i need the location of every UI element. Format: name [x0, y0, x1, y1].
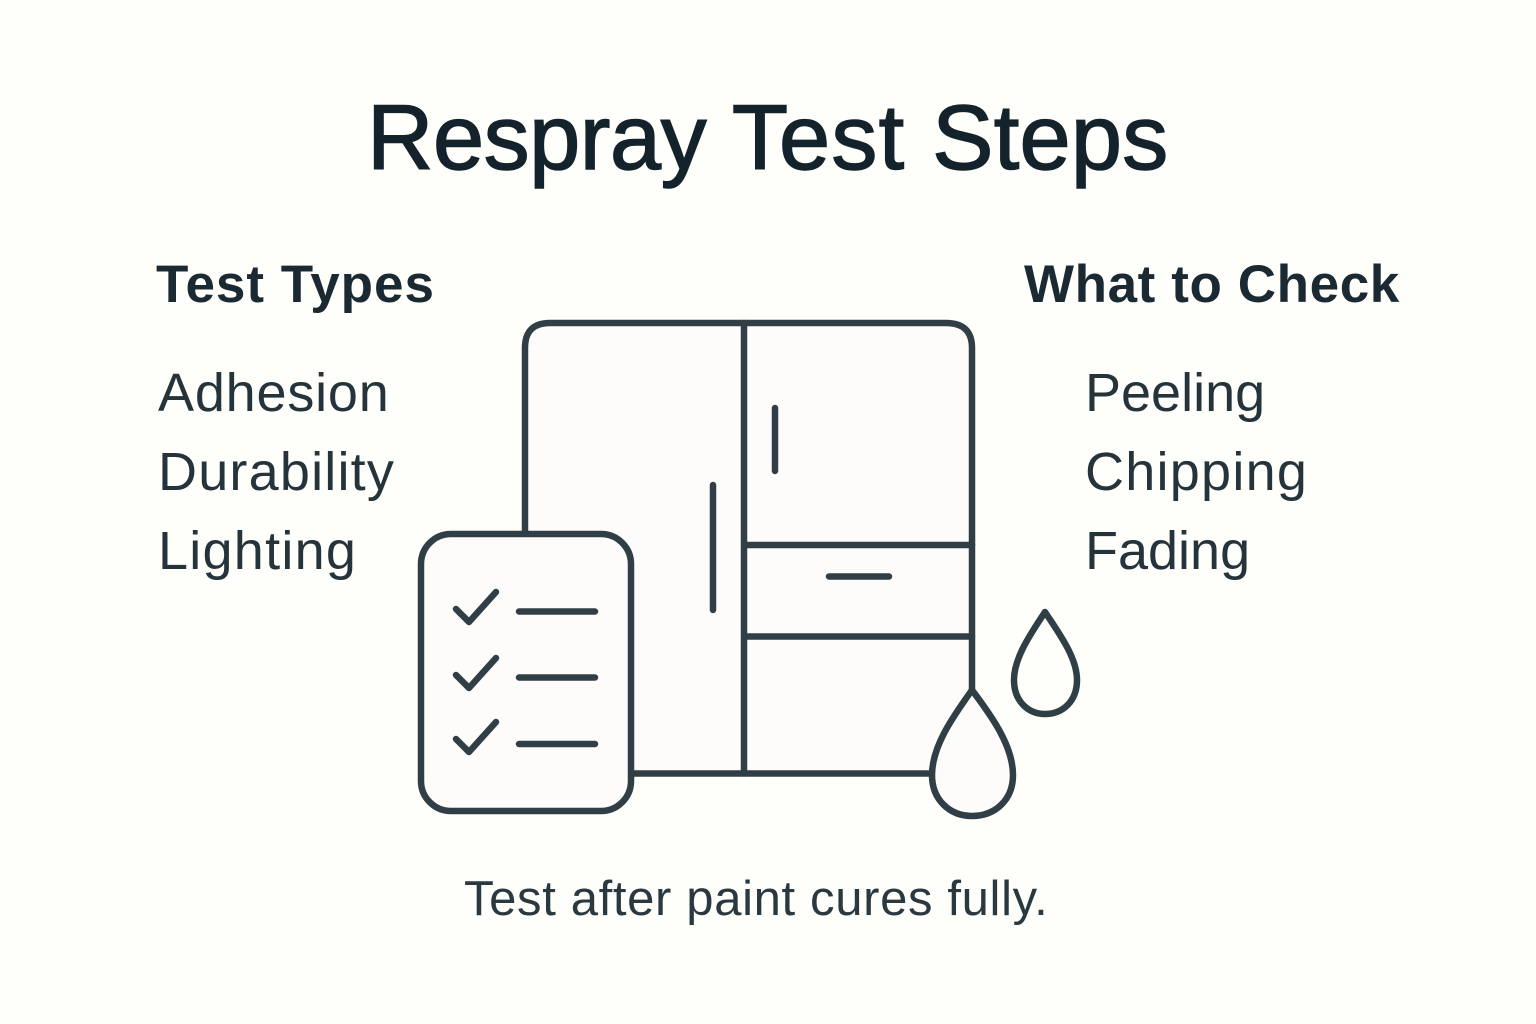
list: test types — [158, 363, 395, 581]
list: what to check: Fading — [1085, 521, 1250, 581]
list: what to check: Chipping — [1085, 442, 1308, 502]
heading: test types: Test Types — [156, 255, 435, 314]
icon: refrigerator — [525, 323, 972, 774]
list: test types: Lighting — [158, 521, 357, 581]
heading: what to check: What to Check — [1024, 255, 1400, 314]
icon: small paint drop — [1014, 612, 1077, 714]
list: what to check — [1085, 363, 1308, 581]
list: test types: Adhesion — [158, 363, 390, 423]
list: what to check: Peeling — [1085, 363, 1265, 423]
icon: large paint drop — [932, 690, 1013, 816]
list: test types: Durability — [158, 442, 395, 502]
icon: checklist — [421, 534, 631, 811]
title: Respray Test Steps — [367, 87, 1168, 189]
footer note: Test after paint cures fully. — [464, 872, 1048, 926]
